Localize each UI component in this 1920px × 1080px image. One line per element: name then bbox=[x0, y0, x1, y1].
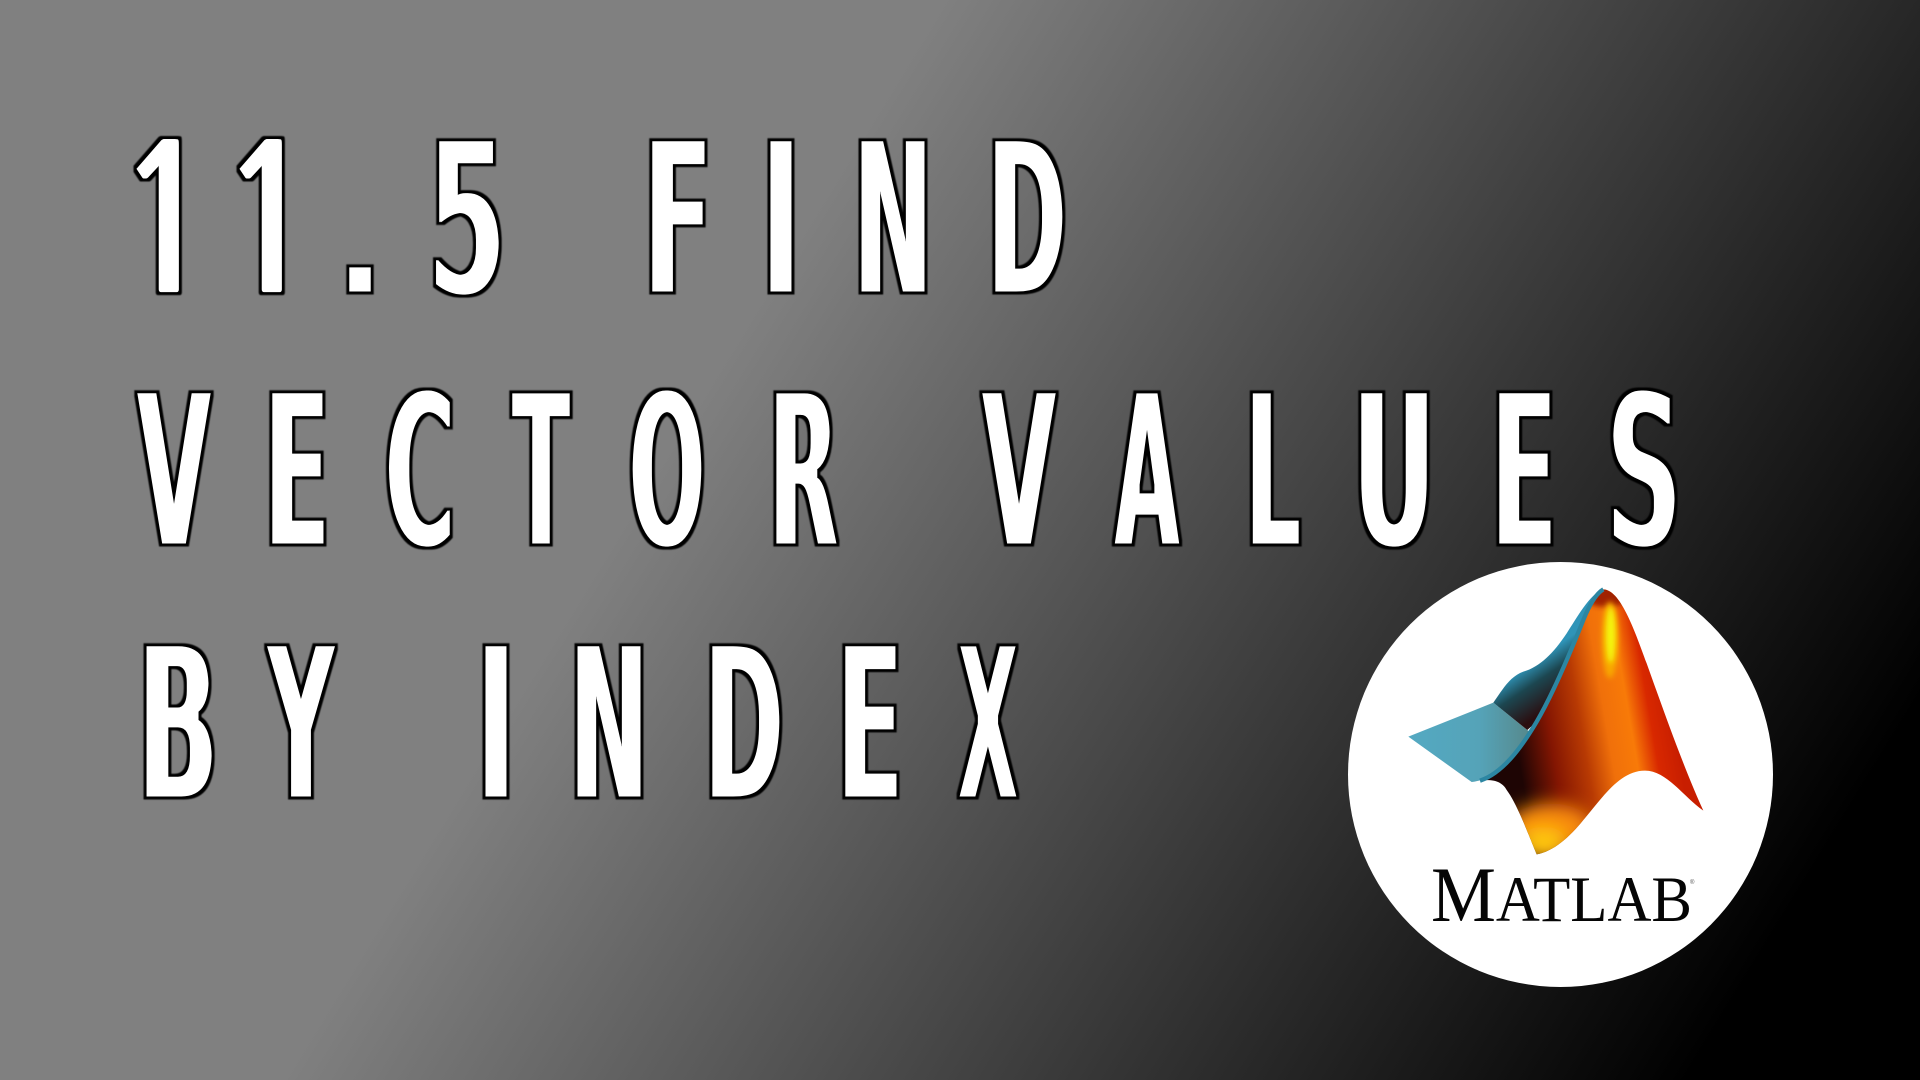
title line 1: 11.5 FIND: . bbox=[339, 138, 381, 336]
title line 2: VECTOR VALUES: E bbox=[1492, 348, 1556, 599]
MATLAB logo badge bbox=[1348, 562, 1773, 987]
title line 2: VECTOR VALUES: T bbox=[513, 347, 569, 599]
title line 2: VECTOR VALUES: C bbox=[385, 348, 455, 599]
title line 2: VECTOR VALUES: S bbox=[1607, 347, 1681, 600]
title line 2: VECTOR VALUES: O bbox=[629, 347, 705, 600]
title line 1: 11.5 FIND: 5 bbox=[428, 94, 506, 347]
title line 1: 11.5 FIND: 1 bbox=[114, 118, 216, 328]
title line 3: BY INDEX: E bbox=[838, 601, 902, 852]
registered mark: ® bbox=[1690, 879, 1695, 886]
title line 1: 11.5 FIND: 1 bbox=[217, 118, 319, 328]
MATLAB wordmark: MATLAB bbox=[1431, 851, 1692, 938]
title line 2: VECTOR VALUES: E bbox=[265, 348, 329, 599]
title line 3: BY INDEX: Y bbox=[266, 601, 336, 852]
title line 2: VECTOR VALUES: A bbox=[1114, 346, 1180, 599]
infographic canvas bbox=[132, 135, 1773, 987]
title line 2: VECTOR VALUES: L bbox=[1246, 346, 1300, 599]
title line 3: BY INDEX: X bbox=[957, 599, 1019, 852]
title line 3: BY INDEX: N bbox=[570, 600, 648, 852]
title line 2: VECTOR VALUES: R bbox=[769, 348, 839, 600]
title line 3: BY INDEX: D bbox=[705, 601, 783, 852]
white circle bbox=[1348, 562, 1773, 987]
title line 1: 11.5 FIND: D bbox=[988, 96, 1066, 347]
title line 1: 11.5 FIND: F bbox=[644, 93, 712, 347]
title line 2: VECTOR VALUES bbox=[137, 346, 1681, 600]
title line 3: BY INDEX: I bbox=[477, 599, 515, 852]
title line 3: BY INDEX: B bbox=[138, 601, 218, 853]
title line 1: 11.5 FIND: N bbox=[854, 95, 932, 347]
title line 3: BY INDEX bbox=[138, 599, 1019, 853]
title line 2: VECTOR VALUES: V bbox=[137, 346, 211, 599]
icon: MATLAB membrane bbox=[1408, 583, 1703, 857]
title line 1: 11.5 FIND bbox=[114, 93, 1066, 347]
title line 2: VECTOR VALUES: V bbox=[982, 346, 1056, 599]
title line 2: VECTOR VALUES: U bbox=[1353, 346, 1435, 599]
title bbox=[114, 93, 1681, 853]
title line 1: 11.5 FIND: I bbox=[762, 94, 800, 347]
